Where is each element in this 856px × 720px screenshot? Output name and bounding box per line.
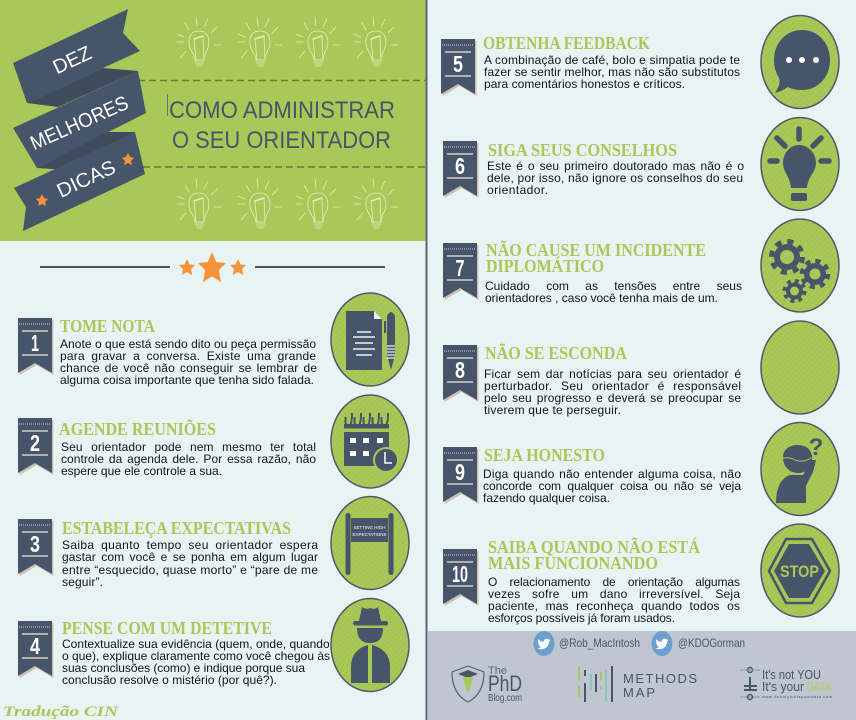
icon: light bulb xyxy=(761,118,839,210)
tip 8 xyxy=(443,321,839,417)
icon: expectations sign: EXPECTATIONS xyxy=(352,532,387,537)
tip 1 xyxy=(18,293,409,387)
heading 2: AGENDE REUNIÕES xyxy=(59,418,216,439)
text 3: seguir”. xyxy=(62,575,103,589)
logo: The PhD Blog: The xyxy=(488,665,507,677)
title: COMO ADMINISTRAR xyxy=(169,97,395,124)
badge 6: 6 xyxy=(455,153,465,179)
text 7: Cuidado com as tensões entre seus xyxy=(485,279,742,293)
logo: It's not you, it's your data: www.itsnotyouitsyourdata.com xyxy=(762,694,833,699)
text 4 xyxy=(62,637,333,687)
text 9: concorde com qualquer coisa ou não se veja xyxy=(483,479,741,493)
logo: It's not you, it's your data xyxy=(740,667,833,700)
logo: It's not you, it's your data: It's your xyxy=(762,679,805,694)
heading 7: NÃO CAUSE UM INCIDENTE xyxy=(486,239,706,260)
column divider xyxy=(426,0,428,720)
badge 9 xyxy=(443,447,478,504)
badge 1: 1 xyxy=(31,330,39,356)
ribbon banner xyxy=(13,9,146,231)
heading 7: DIPLOMÁTICO xyxy=(486,255,604,276)
text 10: O relacionamento de orientação algumas xyxy=(488,575,740,589)
text 7: orientadores , caso você tenha mais de um. xyxy=(485,291,718,305)
heading 8: NÃO SE ESCONDA xyxy=(485,342,627,363)
icon: speech bubble xyxy=(761,16,839,108)
text 5: fazer se sentir melhor, mas não são substitutos xyxy=(484,65,740,79)
badge 3: 3 xyxy=(30,531,40,557)
badge 6 xyxy=(443,141,478,198)
star divider xyxy=(40,252,385,282)
logo: The PhD Blog: Blog.com xyxy=(488,693,522,704)
badge 5 xyxy=(441,39,476,96)
badge 3 xyxy=(18,519,54,576)
tip 3 xyxy=(18,496,409,590)
text 2 xyxy=(61,440,316,478)
tip 10 xyxy=(443,524,839,625)
title: O SEU ORIENTADOR xyxy=(172,127,391,154)
text 3: Saiba quanto tempo seu orientador espera xyxy=(62,538,318,552)
text 6: orientador. xyxy=(487,183,548,197)
badge 10 xyxy=(443,549,478,606)
badge 8: 8 xyxy=(455,357,465,383)
text 9: fazendo qualquer coisa. xyxy=(483,491,610,505)
footer panel xyxy=(428,631,856,720)
badge 1 xyxy=(18,318,54,375)
twitter handle: KDOGorman xyxy=(652,631,745,656)
badge 2: 2 xyxy=(30,430,40,456)
text 4: suas conclusões (como) e indique porque sua xyxy=(62,661,305,675)
tip 7 xyxy=(443,219,839,312)
logo: It's not you, it's your data: It's not YOU xyxy=(762,667,821,682)
text 7 xyxy=(485,279,742,305)
text 10 xyxy=(488,575,740,625)
credit: Tradução CIN: Tradução CIN xyxy=(3,704,119,720)
text 8: perturbador. Seu orientador é responsável xyxy=(484,379,741,393)
text 9: Diga quando não entender alguma coisa, não xyxy=(483,467,741,481)
text 2: espere que ele controle a sua. xyxy=(61,464,222,478)
text 3: entre “esquecido, quase morto” e “pare de me xyxy=(62,563,318,577)
text 8: pelo seu progresso e deverá se preocupar se xyxy=(484,391,741,405)
top row of light bulbs xyxy=(177,17,398,66)
ribbon banner: MELHORES xyxy=(27,92,132,155)
logo: The PhD Blog xyxy=(452,665,522,704)
badge 8 xyxy=(443,345,478,402)
text 6 xyxy=(487,159,744,197)
text 1: chance de você não conseguir se lembrar de xyxy=(60,361,317,375)
text 4: Contextualize sua evidência (quem, onde, quando, xyxy=(62,637,333,651)
icon: document and pen xyxy=(331,293,409,386)
text 5: para comentários honestos e críticos. xyxy=(484,77,685,91)
logo: Methods Map xyxy=(579,666,697,702)
badge 2 xyxy=(18,418,54,475)
heading 3: ESTABELEÇA EXPECTATIVAS xyxy=(62,518,291,538)
text 3 xyxy=(62,538,318,589)
icon: gears xyxy=(761,219,839,312)
text 1: Anote o que está sendo dito ou peça permissão xyxy=(60,337,316,351)
title xyxy=(168,94,395,154)
heading 10: SAIBA QUANDO NÃO ESTÁ xyxy=(488,536,700,557)
logo: Methods Map: MAP xyxy=(623,685,655,700)
tip 6 xyxy=(443,118,839,210)
logo: It's not you, it's your data: DATA xyxy=(807,679,831,694)
text 6: dele, por isso, não ignore os conselhos do seu xyxy=(487,171,743,185)
text 1 xyxy=(60,337,317,387)
logo: The PhD Blog: PhD xyxy=(488,671,522,696)
heading 10: MAIS FUNCIONANDO xyxy=(488,553,658,573)
text 10: vezes sofre um dano irreversível. Seja xyxy=(488,587,740,601)
icon: stop sign xyxy=(761,524,839,617)
ribbon banner: DICAS xyxy=(54,156,119,203)
badge 9: 9 xyxy=(455,459,465,485)
text 8 xyxy=(484,367,741,417)
text 10: paciente, mas reconheça quando todos os xyxy=(488,599,740,613)
icon: empty circle xyxy=(761,321,839,414)
text 4: o que), explique claramente como você chegou às xyxy=(62,649,330,663)
badge 10: 10 xyxy=(452,561,468,587)
logo: Methods Map: METHODS xyxy=(623,671,697,686)
text 5 xyxy=(484,53,740,91)
text 6: Este é o seu primeiro doutorado mas não é o xyxy=(487,159,744,173)
tip 5 xyxy=(441,16,839,108)
twitter handle: KDOGorman: @KDOGorman xyxy=(678,636,745,650)
icon: detective xyxy=(331,598,409,692)
text 10: esforços possíveis já foram usados. xyxy=(488,611,675,625)
twitter handle: Rob MacIntosh xyxy=(534,631,640,656)
text 8: Ficar sem dar notícias para seu orientador é xyxy=(484,367,741,381)
heading 5: OBTENHA FEEDBACK xyxy=(483,33,650,53)
icon: calendar xyxy=(331,395,409,488)
text 2: controle da agenda dele. Por essa razão, não xyxy=(61,452,316,466)
heading 4: PENSE COM UM DETETIVE xyxy=(62,618,272,638)
heading 1: TOME NOTA xyxy=(60,316,155,336)
tip 9 xyxy=(443,422,839,516)
tip 2 xyxy=(18,395,409,488)
text 8: tiverem que te perseguir. xyxy=(484,403,621,417)
text 5: A combinação de café, bolo e simpatia pode te xyxy=(484,53,740,67)
text 1: para gravar a conversa. Existe uma grande xyxy=(60,349,316,363)
text 1: alguma coisa importante que tenha sido falada. xyxy=(60,373,314,387)
badge 4 xyxy=(18,621,54,678)
badge 7 xyxy=(443,243,478,300)
text 3: gastar com você e se ponha em algum lugar xyxy=(62,550,318,564)
icon: questioning person: ? xyxy=(809,434,823,461)
badge 7: 7 xyxy=(456,255,464,281)
icon: expectations sign xyxy=(331,496,409,590)
heading 6: SIGA SEUS CONSELHOS xyxy=(488,140,677,160)
bottom row of light bulbs xyxy=(177,179,398,228)
icon: expectations sign: SETTING HIGH xyxy=(353,525,386,530)
heading 7 xyxy=(486,239,706,276)
twitter handle: Rob MacIntosh: @Rob_MacIntosh xyxy=(559,636,640,650)
text 2: Seu orientador pode nem mesmo ter total xyxy=(61,440,316,454)
icon: questioning person xyxy=(761,422,839,516)
header panel xyxy=(0,0,426,241)
ribbon banner: DEZ xyxy=(50,42,95,79)
icon: stop sign: STOP xyxy=(780,562,819,581)
tip 4 xyxy=(18,598,409,692)
badge 4: 4 xyxy=(30,633,40,659)
text 4: conclusão resolve o mistério (por quê?). xyxy=(62,673,277,687)
badge 5: 5 xyxy=(453,51,463,77)
heading 9: SEJA HONESTO xyxy=(484,445,605,465)
text 9 xyxy=(483,467,741,505)
heading 10 xyxy=(488,536,700,573)
